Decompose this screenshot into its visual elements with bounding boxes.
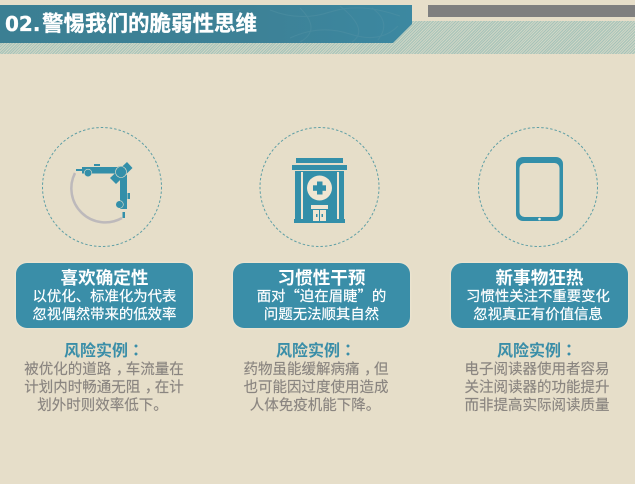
panel: card 2 习惯性干预 bbox=[233, 263, 410, 328]
text block: risk example 2: ， bbox=[364, 358, 379, 379]
panel: card 1 喜欢确定性 bbox=[16, 263, 193, 328]
icon: hospital in dashed circle bbox=[260, 127, 380, 247]
text block: risk example 3: 而非提高实际阅读质量 bbox=[464, 398, 610, 414]
panel: card 1 喜欢确定性: 以优化、标准化为代表 bbox=[33, 289, 176, 305]
text block: risk example 3: 电子阅读器使用者容易 bbox=[464, 362, 610, 378]
panel: card 3 新事物狂热: 忽视真正有价值信息 bbox=[473, 307, 603, 323]
text block: risk example 1: 计划内时畅通无阻 在计 bbox=[24, 380, 184, 396]
text block: risk example 1: 划外时则效率低下。 bbox=[37, 398, 168, 414]
icon: compass in dashed circle bbox=[42, 127, 162, 247]
text block: risk example 1 bbox=[24, 337, 184, 414]
text block: risk example 2 bbox=[244, 337, 388, 414]
grey top-right bar bbox=[428, 5, 635, 17]
panel: card 3 新事物狂热: 习惯性关注不重要变化 bbox=[466, 289, 610, 305]
panel: card 2 习惯性干预: 问题无法顺其自然 bbox=[264, 307, 379, 323]
text block: risk example 1: ， bbox=[145, 376, 159, 397]
text block: risk example 2: 人体免疫机能下降。 bbox=[250, 398, 380, 414]
panel: card 1 喜欢确定性: 喜欢确定性 bbox=[60, 268, 148, 288]
text block: risk example 3: 风险实例： bbox=[497, 337, 577, 361]
text block: risk example 1: 风险实例： bbox=[64, 337, 144, 361]
text block: risk example 1: 被优化的道路 车流量在 bbox=[24, 362, 184, 378]
text block: risk example 2: 也可能因过度使用造成 bbox=[244, 380, 388, 396]
text block: risk example 3: 关注阅读器的功能提升 bbox=[464, 380, 610, 396]
text block: risk example 2: 药物虽能缓解病痛 但 bbox=[244, 362, 388, 378]
text block: risk example 2: 风险实例： bbox=[276, 337, 356, 361]
panel: card 1 喜欢确定性: 忽视偶然带来的低效率 bbox=[33, 307, 176, 323]
hatched header strip bbox=[0, 21, 635, 54]
panel: card 3 新事物狂热 bbox=[451, 263, 628, 328]
title: 警惕我们的脆弱性思维 bbox=[42, 12, 257, 36]
title: 02. bbox=[5, 12, 40, 36]
panel: card 3 新事物狂热: 新事物狂热 bbox=[496, 268, 583, 288]
panel: card 2 习惯性干预: 习惯性干预 bbox=[278, 268, 365, 288]
text block: risk example 1: ， bbox=[116, 358, 130, 379]
text block: risk example 3 bbox=[464, 337, 610, 414]
icon: tablet in dashed circle bbox=[478, 127, 598, 247]
panel: card 2 习惯性干预: 面对“迫在眉睫”的 bbox=[257, 285, 386, 306]
header band with title bbox=[0, 5, 412, 43]
